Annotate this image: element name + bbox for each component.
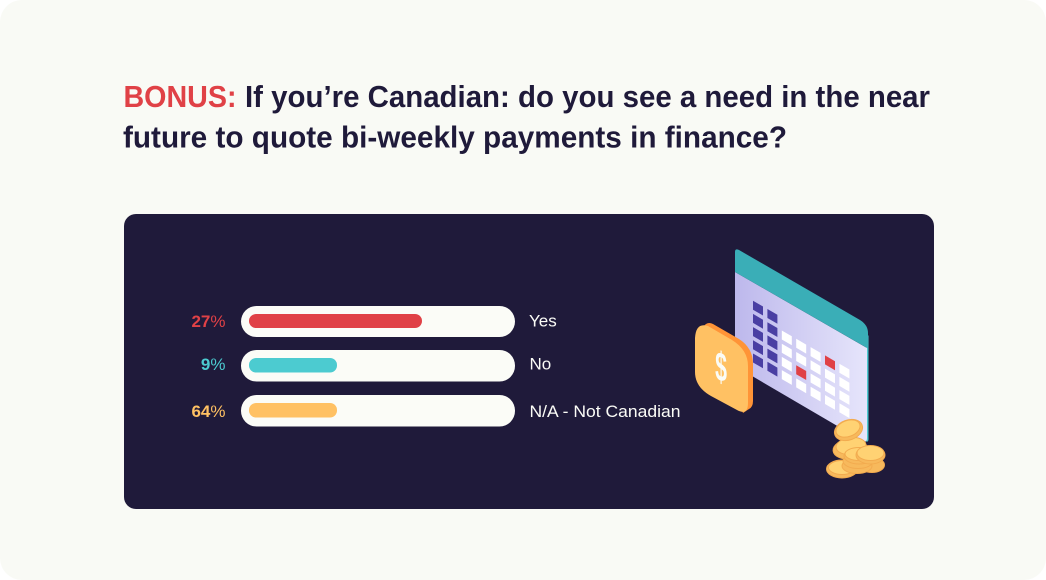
title: future to quote bi-weekly payments in finance? <box>123 120 787 154</box>
calendar <box>735 249 868 442</box>
calendar white day cells <box>782 330 849 418</box>
bar row: Yes 27% <box>191 306 557 337</box>
bar row: No 9%: 9% <box>201 355 226 374</box>
bar row: Yes 27%: Yes <box>529 312 557 330</box>
icon: dollar tile: $ <box>715 342 727 391</box>
bar row: Yes 27%: 27% <box>191 312 226 331</box>
title: BONUS: <box>124 80 236 114</box>
bar row: N/A 64%: 64% <box>191 402 226 421</box>
bar row: No 9% <box>201 350 551 382</box>
bar row: N/A 64% <box>191 395 680 426</box>
calendar dark day cells <box>753 301 777 377</box>
title <box>123 80 930 154</box>
calendar red day cells <box>796 355 835 380</box>
panel: chart <box>124 214 934 509</box>
bar row: No 9%: No <box>530 354 551 374</box>
title: If you’re Canadian: do you see a need in the near <box>245 80 930 114</box>
bar row: N/A 64%: N/A - Not Canadian <box>530 402 680 421</box>
icon: dollar tile <box>695 323 753 413</box>
illustration: calendar with dollar tile and coins <box>695 249 885 478</box>
icon: gold coins <box>826 416 885 478</box>
